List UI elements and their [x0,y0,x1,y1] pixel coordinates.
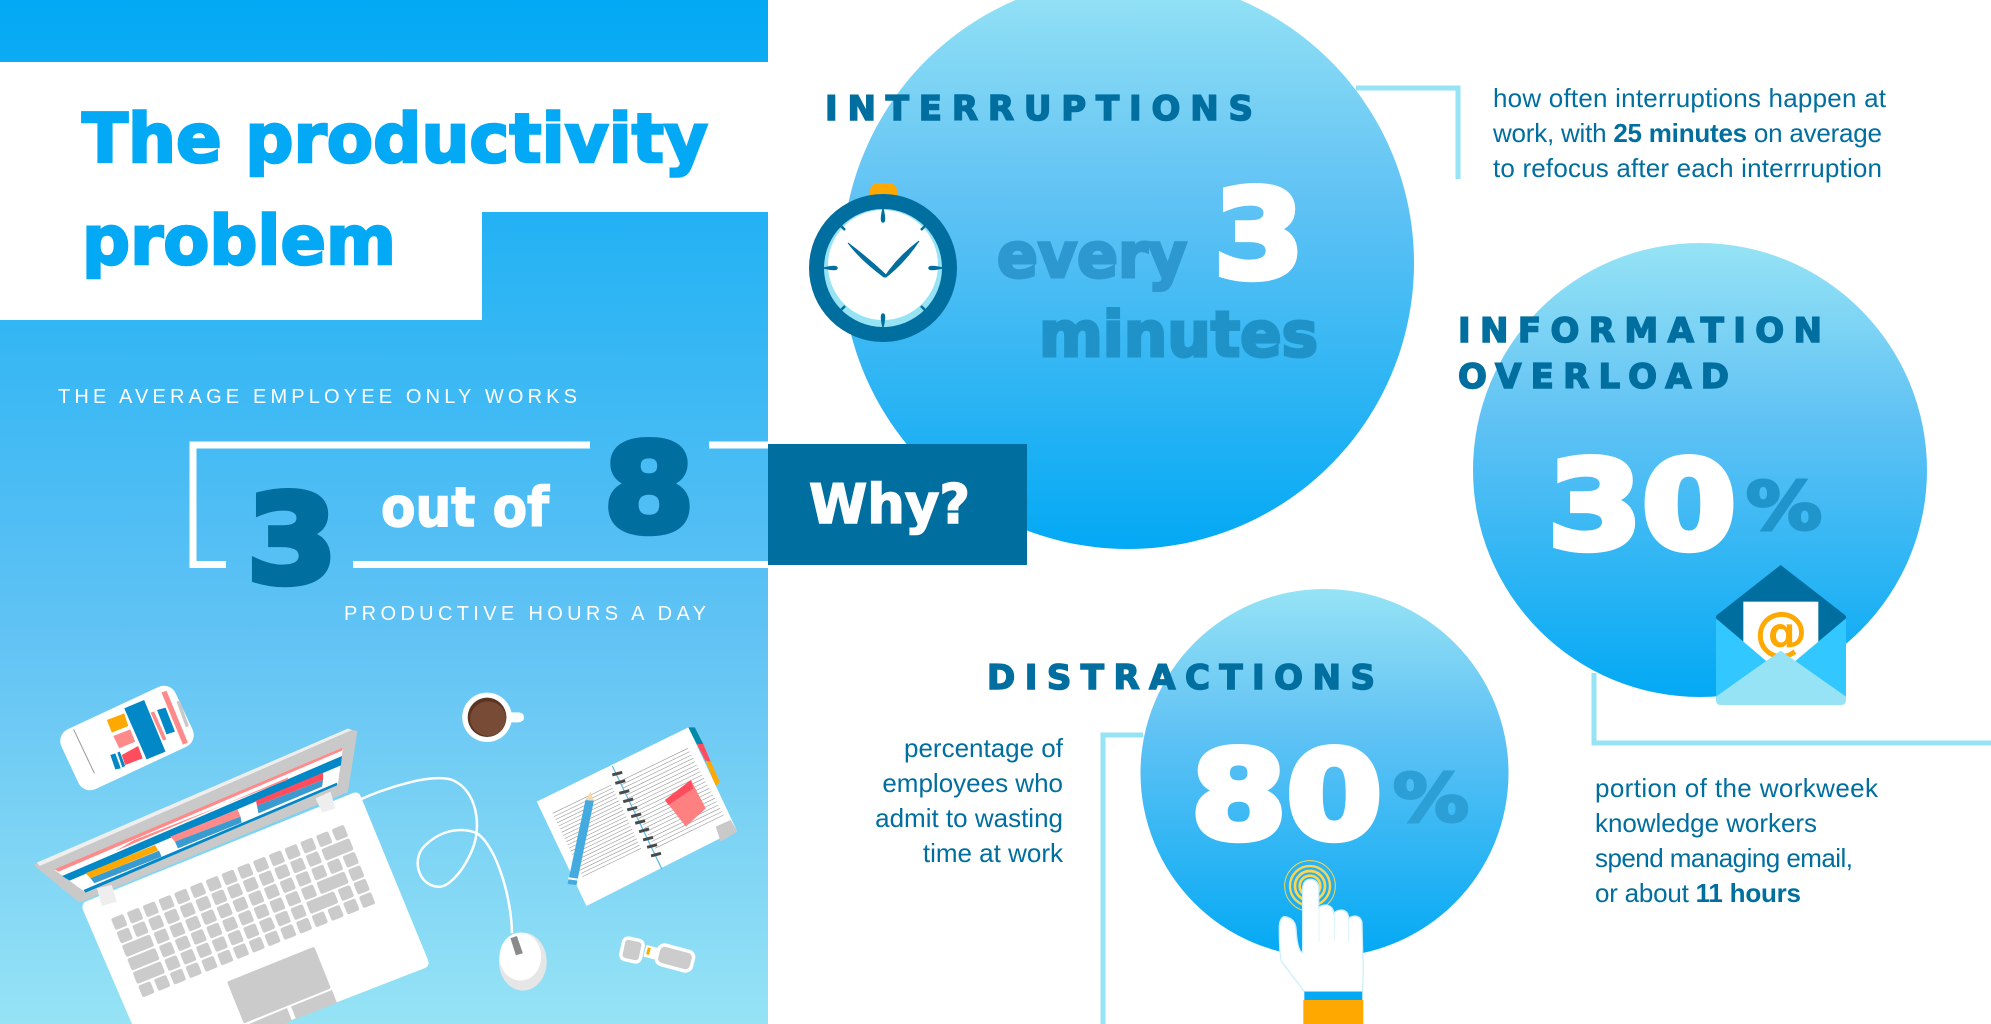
icon: laptop screen [35,729,356,906]
panel: left blue background [0,0,768,1024]
text: information overload description: portion of the workweek [1595,773,1879,803]
heading: information overload: OVERLOAD [1458,357,1729,397]
panel: interruptions circle [842,0,1414,549]
stat: 3 out of 8: 8 [604,418,694,560]
icon: email envelope [1716,565,1846,705]
text: distractions description: percentage of [904,733,1064,763]
text: distractions description [875,733,1064,868]
stat: 30 percent: % [1746,468,1822,545]
title: The productivity [82,100,708,179]
stat: 30 percent: 30 [1548,435,1736,577]
panel: information overload circle [1473,243,1927,697]
stat: 80 percent: 80 [1191,725,1382,867]
stat: every 3 minutes: 3 [1214,164,1304,306]
text: interruptions description: how often interruptions happen at [1493,83,1887,113]
icon: mouse [499,933,547,991]
heading: information overload [1458,311,1822,397]
stat: every 3 minutes: minutes [1039,298,1318,371]
text: information overload description: or about 11 hours [1595,878,1801,908]
text: distractions description: time at work [923,838,1064,868]
bracket frame [193,445,768,564]
text: interruptions description: to refocus after each interrruption [1493,153,1882,183]
heading: distractions: DISTRACTIONS [987,658,1375,698]
icon: stopwatch [809,183,957,342]
icon: email envelope: @ [1754,600,1808,662]
text: information overload description: knowledge workers [1595,808,1817,838]
text: distractions description: employees who [882,768,1063,798]
icon: mouse cable [355,778,512,933]
text: information overload description [1595,773,1879,908]
icon: usb stick [620,937,695,972]
icon: phone body [56,681,198,795]
stat: every 3 minutes: every [997,219,1187,292]
text: information overload description: spend managing email, [1595,843,1853,873]
text: distractions description: admit to wasting [875,803,1063,833]
connector: interruptions [1356,88,1458,179]
stat: 80 percent: % [1393,760,1469,837]
stat: 3 out of 8: 3 [247,469,337,611]
heading: interruptions: INTERRUPTIONS [825,89,1253,129]
heading: information overload: INFORMATION [1458,311,1822,351]
connector: distractions [1103,735,1143,1024]
icon: laptop base [82,792,429,1024]
caption: average employee: THE AVERAGE EMPLOYEE ONLY WORKS [58,386,577,408]
connector: information overload [1594,673,1991,743]
text: interruptions description [1492,83,1887,183]
icon: pointing hand [1279,861,1363,1024]
stat: 3 out of 8: out of [381,476,549,539]
caption: productive hours: PRODUCTIVE HOURS A DAY [344,603,706,625]
illustration: desk items [35,681,738,1024]
stat: every 3 minutes [997,164,1318,371]
title: problem [82,202,396,281]
title [82,100,708,281]
panel: distractions circle [1140,589,1508,957]
stat: 80 percent [1191,725,1469,867]
icon: notebook [537,727,738,906]
icon: phone screen [74,691,189,773]
stat: 3 out of 8 [247,418,694,611]
callout: why: Why? [809,473,970,536]
text: interruptions description: work, with 25 minutes on average [1492,118,1882,148]
icon: coffee cup [462,693,524,742]
callout: why [768,444,1027,565]
stat: 30 percent [1548,435,1822,577]
title background [0,62,768,320]
